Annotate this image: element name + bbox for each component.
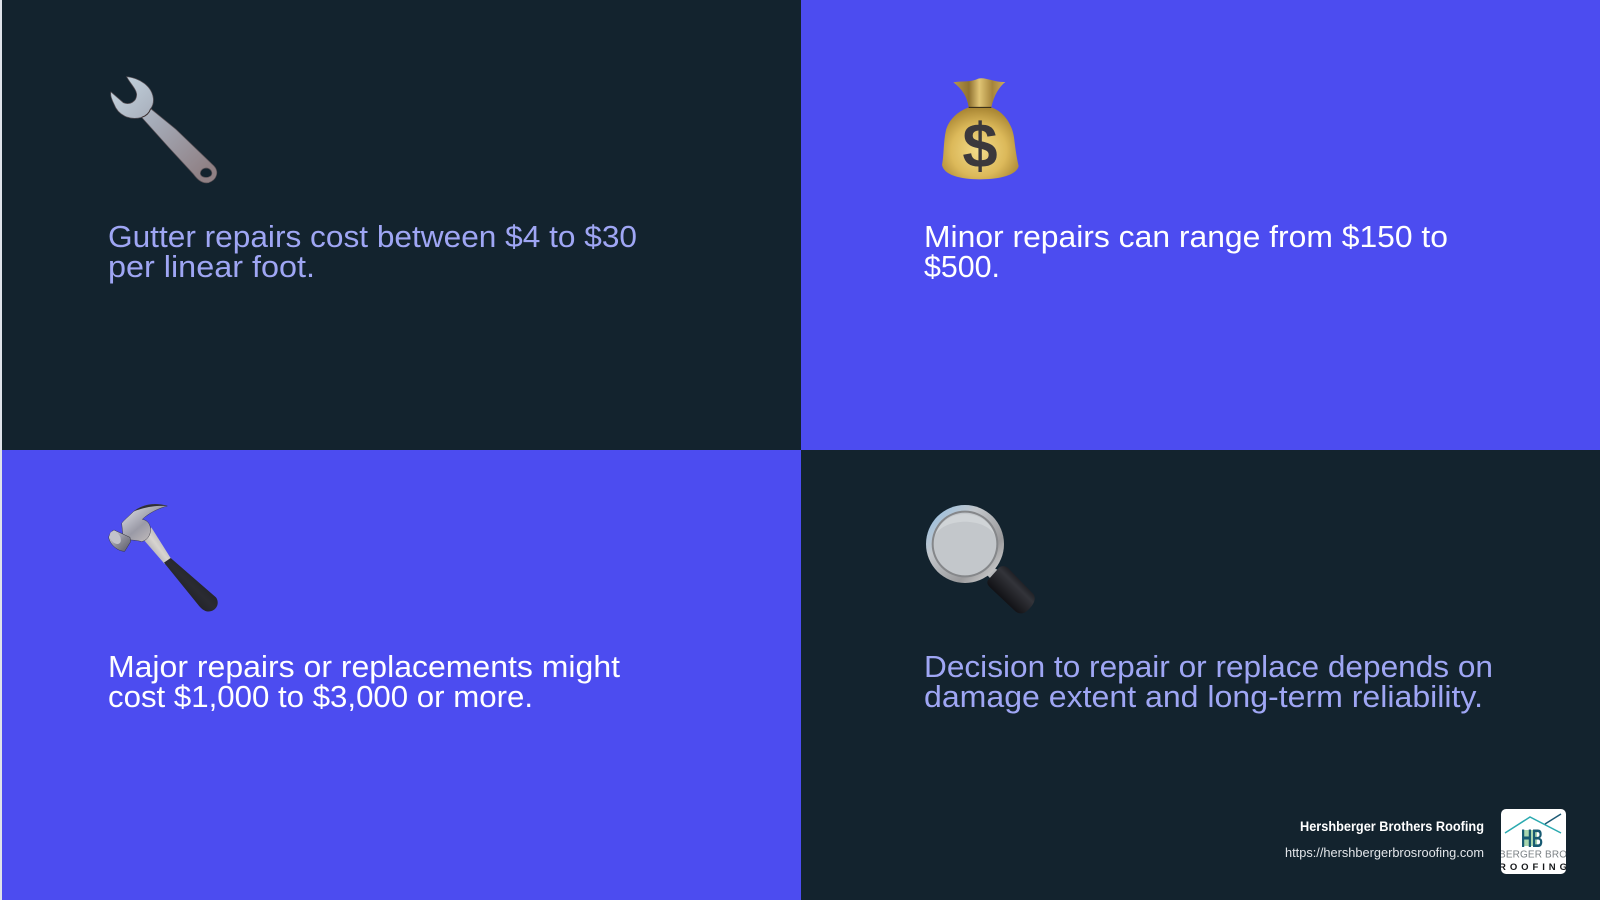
panel: minor repairs: [801, 0, 1600, 450]
footer: company name and url: [1285, 818, 1484, 860]
panel: repair or replace decision: [801, 450, 1600, 900]
icon: money bag: [942, 78, 1019, 181]
text: repair or replace decision: [924, 649, 1493, 714]
logo: Hershberger Brothers badge: BERGER BRO: [1499, 850, 1567, 860]
text: gutter repair cost: [108, 219, 637, 284]
text: minor repairs: [924, 219, 1448, 284]
logo: Hershberger Brothers badge: HB: [1521, 825, 1543, 853]
text: repair or replace decision: damage extent and long-term reliability.: [924, 679, 1483, 714]
text: major repairs: [108, 649, 620, 714]
text: gutter repair cost: per linear foot.: [108, 249, 315, 284]
panel: major repairs: [2, 450, 801, 900]
footer: company name and url: Hershberger Brothers Roofing: [1300, 818, 1484, 834]
panel: gutter repair cost: [2, 0, 801, 450]
icon: magnifying glass: [926, 505, 1035, 614]
footer: company name and url: https://hershbergerbrosroofing.com: [1285, 846, 1484, 860]
text: gutter repair cost: Gutter repairs cost between $4 to $30: [108, 219, 637, 254]
icon: hammer: [108, 504, 218, 612]
icon: money bag: $: [962, 111, 998, 181]
icon: wrench: [110, 76, 218, 184]
text: minor repairs: $500.: [924, 249, 1000, 284]
logo: Hershberger Brothers badge: [1501, 809, 1566, 874]
text: repair or replace decision: Decision to repair or replace depends on: [924, 649, 1493, 684]
text: minor repairs: Minor repairs can range from $150 to: [924, 219, 1448, 254]
text: major repairs: Major repairs or replacements might: [108, 649, 620, 684]
logo: Hershberger Brothers badge: ROOFING: [1499, 862, 1567, 873]
text: major repairs: cost $1,000 to $3,000 or more.: [108, 679, 533, 714]
